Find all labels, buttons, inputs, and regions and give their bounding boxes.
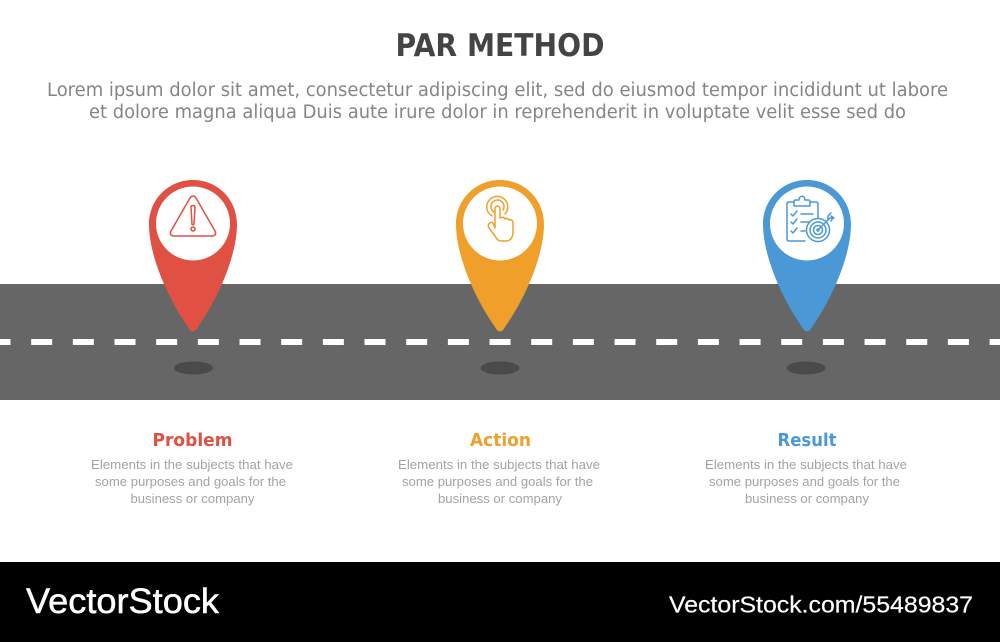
description: action: business or company [438,491,563,506]
description: result: business or company [745,491,870,506]
subtitle text block: et dolore magna aliqua Duis aute irure dolor in reprehenderit in voluptate velit esse sed do [89,102,906,123]
description: result [705,457,907,506]
title: PAR METHOD [396,28,604,64]
icon: clipboard and target [787,196,834,242]
heading: result: Result [778,431,836,451]
subtitle text block: Lorem ipsum dolor sit amet, consectetur adipiscing elit, sed do eiusmod tempor incididunt ut labore [47,80,948,101]
heading: problem: Problem [152,431,232,451]
icon: pointing hand [487,196,513,241]
pin: problem [149,180,237,332]
description: action: some purposes and goals for the [402,474,593,489]
description: action: Elements in the subjects that have [398,457,600,472]
footer brand: VectorStock [26,582,220,621]
pin: result [763,180,851,332]
pin shadow: problem [174,362,213,374]
pin shadow: action [480,362,520,374]
description: result: Elements in the subjects that have [705,457,907,472]
description: problem [91,457,293,506]
column: result [705,431,907,506]
description: problem: Elements in the subjects that have [91,457,293,472]
subtitle text block [47,80,948,123]
heading: action: Action [470,431,531,451]
footer bar [0,562,1000,642]
road [0,284,1000,400]
description: result: some purposes and goals for the [709,474,900,489]
icon: warning triangle [170,196,216,236]
column: problem [91,431,293,506]
pin: action [456,180,544,332]
description: problem: business or company [130,491,255,506]
footer url: VectorStock.com/55489837 [669,592,973,618]
pin shadow: result [786,362,826,374]
description: problem: some purposes and goals for the [95,474,286,489]
column: action [398,431,600,506]
description: action [398,457,600,506]
